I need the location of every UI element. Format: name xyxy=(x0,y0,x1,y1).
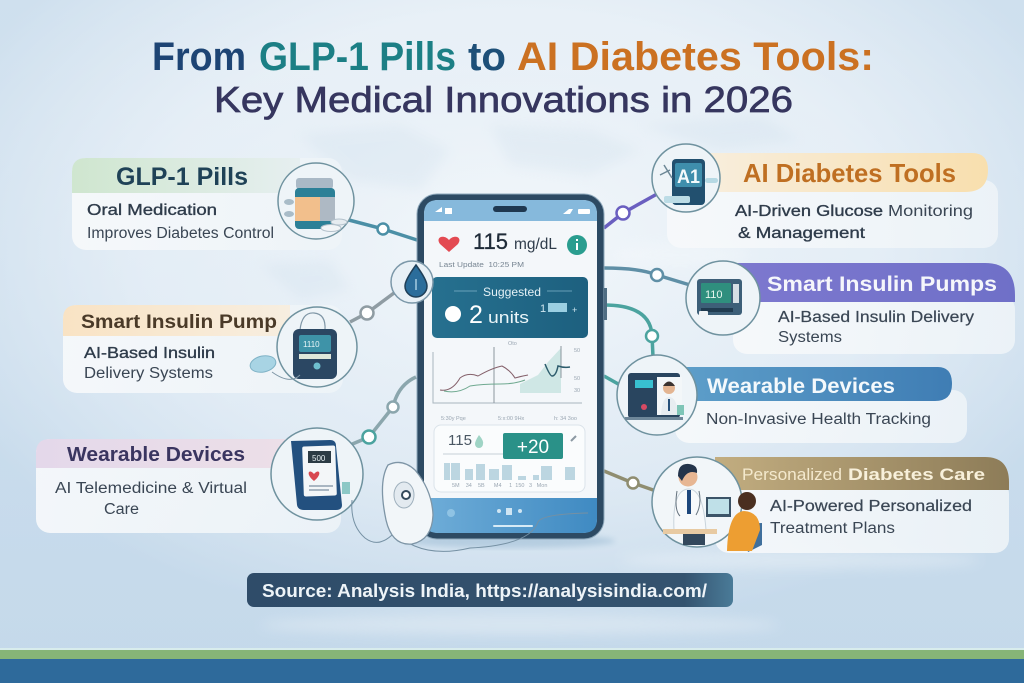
suggested dose box: + xyxy=(572,305,577,315)
title: AI Diabetes Tools: xyxy=(517,35,874,79)
glucose line chart xyxy=(433,341,582,403)
phone shadow xyxy=(405,534,615,548)
phone xyxy=(405,194,615,548)
glucose line chart: 30 xyxy=(574,388,580,394)
icon: AI device: A1 xyxy=(677,167,700,188)
text: AI-based delivery: AI-Based Insulin Delivery xyxy=(778,309,974,326)
glucose line chart: Oto xyxy=(508,341,517,347)
+20 badge: +20 xyxy=(517,437,549,458)
text: AI-based insulin: AI-Based Insulin xyxy=(84,345,215,362)
chart axis labels: h: 34 3oo xyxy=(554,416,577,422)
heading: Personalized Diabetes Care: Diabetes Care xyxy=(848,465,985,484)
text: AI-driven monitoring xyxy=(735,203,973,220)
text: systems: Systems xyxy=(778,329,842,346)
panel: Wearable Devices (right) xyxy=(675,367,967,443)
text: improves control: Improves Diabetes Control xyxy=(87,225,274,242)
chart axis labels: 5:30y Pqe xyxy=(441,416,466,422)
text: AI-driven monitoring: AI-Driven Glucose xyxy=(735,203,883,220)
icon: insulin pump monitor: 110 xyxy=(705,289,723,301)
panel: Personalized Diabetes Care xyxy=(715,457,1009,553)
text: delivery systems: Delivery Systems xyxy=(84,365,213,382)
suggested dose box: 1 xyxy=(540,303,546,315)
text: AI-driven monitoring: Monitoring xyxy=(888,203,973,220)
heading: GLP-1 Pills: GLP-1 Pills xyxy=(116,163,248,191)
heading: Smart Insulin Pumps: Smart Insulin Pumps xyxy=(767,273,997,296)
icon: pill bottle xyxy=(278,163,354,239)
glucose reading: 115 xyxy=(473,229,508,254)
text: personalized plans: AI-Powered Personalized xyxy=(770,498,972,515)
glucose sensor with wire xyxy=(352,462,588,551)
status bar xyxy=(424,200,597,221)
chart axis labels xyxy=(441,416,577,422)
heading: Wearable Devices: Wearable Devices xyxy=(67,444,245,466)
icon: AI device xyxy=(652,144,720,212)
text: care: Care xyxy=(104,501,139,518)
stats card xyxy=(434,425,585,492)
text: telemedicine: AI Telemedicine & Virtual xyxy=(55,480,247,497)
heading: AI Diabetes Tools: AI Diabetes Tools xyxy=(743,158,956,188)
stats card: 5M 34 5B M4 1 150 3 Mon xyxy=(452,483,547,489)
icon: telehealth doctor xyxy=(617,355,697,435)
phone screen xyxy=(424,200,597,533)
suggested dose box xyxy=(432,277,588,338)
icon: wearable monitor: 500 xyxy=(312,454,326,463)
title: to xyxy=(468,35,506,79)
glucose line chart: 50 xyxy=(574,348,580,354)
title: Key Medical Innovations in 2026 xyxy=(214,79,793,120)
bottom band xyxy=(0,648,1024,683)
title: From xyxy=(152,35,246,79)
icon: info xyxy=(567,235,587,255)
suggested dose box: 2 xyxy=(469,301,483,329)
glucose reading xyxy=(473,229,557,254)
glucose line chart: 50 xyxy=(574,376,580,382)
icon: doctor and patient xyxy=(652,457,762,552)
connector lines xyxy=(345,194,690,491)
icon: wearable monitor xyxy=(271,428,363,520)
stats card: 115 xyxy=(448,432,472,449)
chart axis labels: 5:x:00 9Hx xyxy=(498,416,525,422)
source bar: Source: Analysis India, https://analysisindia.com/ xyxy=(262,581,707,601)
heading: Personalized Diabetes Care xyxy=(742,465,985,484)
glucose reading: mg/dL xyxy=(514,236,557,253)
bar chart xyxy=(444,463,575,480)
phone body xyxy=(417,194,604,539)
icon: water drop bubble xyxy=(391,261,433,303)
title xyxy=(152,35,874,120)
suggested dose box: Suggested xyxy=(483,285,541,299)
panel: Wearable Devices (left) xyxy=(36,439,341,533)
icon: heart xyxy=(439,237,459,252)
source bar xyxy=(247,573,733,607)
icon: insulin pump: 1110 xyxy=(303,340,320,349)
panel: GLP-1 Pills xyxy=(72,158,342,250)
text: treatment plans: Treatment Plans xyxy=(770,520,895,537)
text: oral medication: Oral Medication xyxy=(87,202,217,219)
panel: Smart Insulin Pumps xyxy=(730,263,1015,354)
heading: Wearable Devices: Wearable Devices xyxy=(707,375,895,398)
phone bottom bar xyxy=(424,498,597,533)
panel: Smart Insulin Pump xyxy=(63,305,343,393)
panel: AI Diabetes Tools xyxy=(667,153,998,248)
heading: Smart Insulin Pump: Smart Insulin Pump xyxy=(81,312,277,333)
last update: Last Update 10:25 PM xyxy=(439,260,524,269)
text: management: & Management xyxy=(738,225,866,242)
icon: insulin pump monitor xyxy=(686,261,760,335)
title: GLP-1 Pills xyxy=(259,35,456,79)
heading: Personalized Diabetes Care: Personalized xyxy=(742,465,842,484)
icon: insulin pump xyxy=(249,307,357,387)
+20 badge xyxy=(503,433,563,459)
suggested dose box: units xyxy=(488,308,529,327)
text: health tracking: Non-Invasive Health Tracking xyxy=(706,411,931,428)
